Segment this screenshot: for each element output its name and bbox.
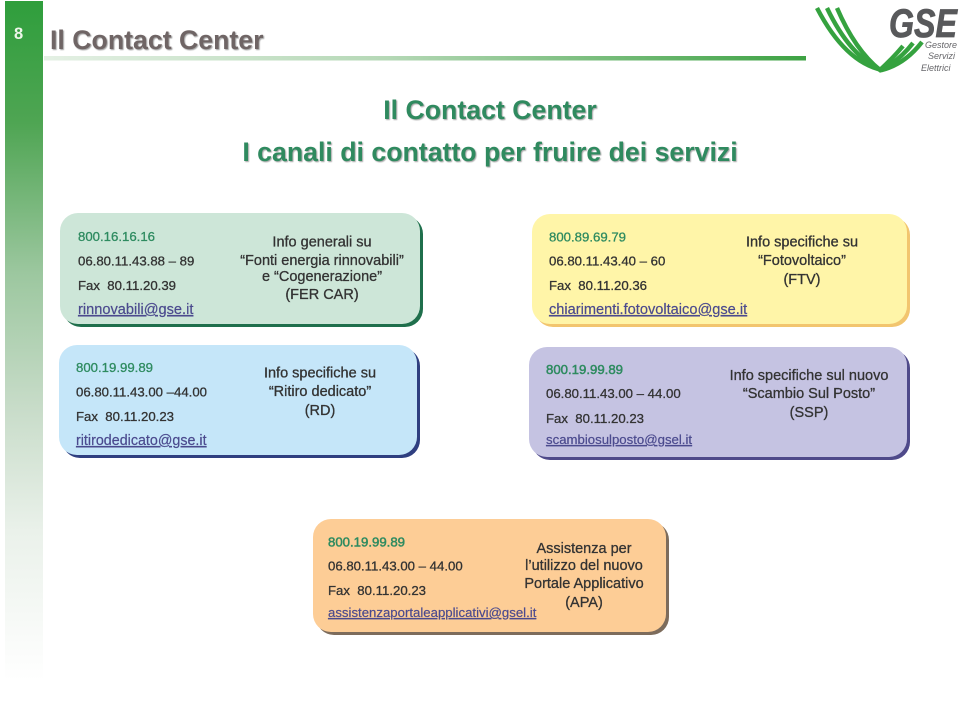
logo: Gestore Servizi Elettrici: Servizi — [928, 51, 956, 61]
panel: SSP: scambiosulposto@gsel.it — [546, 432, 692, 447]
panel: RD: 06.80.11.43.00 –44.00 — [76, 384, 207, 400]
GSE logo — [817, 2, 958, 73]
panel: SSP: 06.80.11.43.00 – 44.00 — [546, 386, 681, 401]
panel: APA: Portale Applicativo — [524, 576, 644, 592]
left green sidebar — [5, 1, 43, 681]
header rule — [44, 56, 806, 60]
panel: FER CAR: “Fonti energia rinnovabili” — [240, 253, 404, 269]
panel: RD: “Ritiro dedicato” — [269, 384, 371, 400]
panel: RD — [59, 345, 420, 458]
panel: APA: 06.80.11.43.00 – 44.00 — [328, 558, 463, 574]
logo: Gestore Servizi Elettrici — [921, 40, 957, 73]
page number: 8 — [14, 25, 23, 43]
panel: RD: Info specifiche su — [264, 366, 376, 382]
panel: SSP: 800.19.99.89 — [546, 362, 623, 377]
panel: FTV: 800.89.69.79 — [549, 230, 626, 244]
panel: FER CAR: Info generali su — [272, 234, 372, 250]
header title: Il Contact Center — [50, 25, 264, 55]
panel: FER CAR: e “Cogenerazione” — [262, 269, 382, 285]
panel: FER CAR: 06.80.11.43.88 – 89 — [78, 254, 194, 268]
main heading — [242, 95, 738, 167]
panel: RD: Fax 80.11.20.23 — [76, 409, 174, 424]
logo: green curves — [817, 8, 922, 70]
panel: RD: 800.19.99.89 — [76, 360, 153, 375]
panel: FER CAR: rinnovabili@gse.it — [78, 302, 193, 318]
panel: FTV: (FTV) — [783, 272, 821, 288]
panel: SSP: (SSP) — [790, 405, 828, 421]
panel: SSP: Fax 80.11.20.23 — [546, 411, 644, 426]
panel: FTV: Info specifiche su — [746, 234, 858, 250]
panel: APA: (APA) — [565, 595, 603, 611]
logo: Gestore Servizi Elettrici: Gestore — [925, 40, 957, 50]
panel: APA: assistenzaportaleapplicativi@gsel.it — [328, 605, 537, 620]
panel: APA: Fax 80.11.20.23 — [328, 583, 426, 598]
panel: FTV: chiarimenti.fotovoltaico@gse.it — [549, 302, 747, 318]
panel: FER CAR — [60, 213, 423, 327]
panel: FER CAR: (FER CAR) — [285, 287, 359, 303]
panel: FER CAR: 800.16.16.16 — [78, 229, 155, 244]
panel: APA — [313, 519, 669, 635]
panel: RD: ritirodedicato@gse.it — [76, 433, 207, 449]
panel: FTV — [532, 214, 910, 327]
main heading: I canali di contatto per fruire dei servizi — [242, 137, 738, 167]
panel: APA: l’utilizzo del nuovo — [525, 558, 643, 574]
main heading: Il Contact Center — [383, 95, 597, 125]
panel: SSP: “Scambio Sul Posto” — [743, 386, 875, 402]
panel: FTV: 06.80.11.43.40 – 60 — [549, 254, 665, 268]
panel: FER CAR: Fax 80.11.20.39 — [78, 278, 176, 293]
panel: APA: 800.19.99.89 — [328, 534, 405, 550]
logo: Gestore Servizi Elettrici: Elettrici — [921, 63, 952, 73]
panel: FTV: “Fotovoltaico” — [758, 253, 846, 269]
panel: SSP: Info specifiche sul nuovo — [730, 368, 888, 384]
panel: RD: (RD) — [305, 403, 335, 419]
panel: SSP — [529, 347, 910, 460]
panel: APA: Assistenza per — [536, 541, 632, 557]
panel: FTV: Fax 80.11.20.36 — [549, 278, 647, 293]
